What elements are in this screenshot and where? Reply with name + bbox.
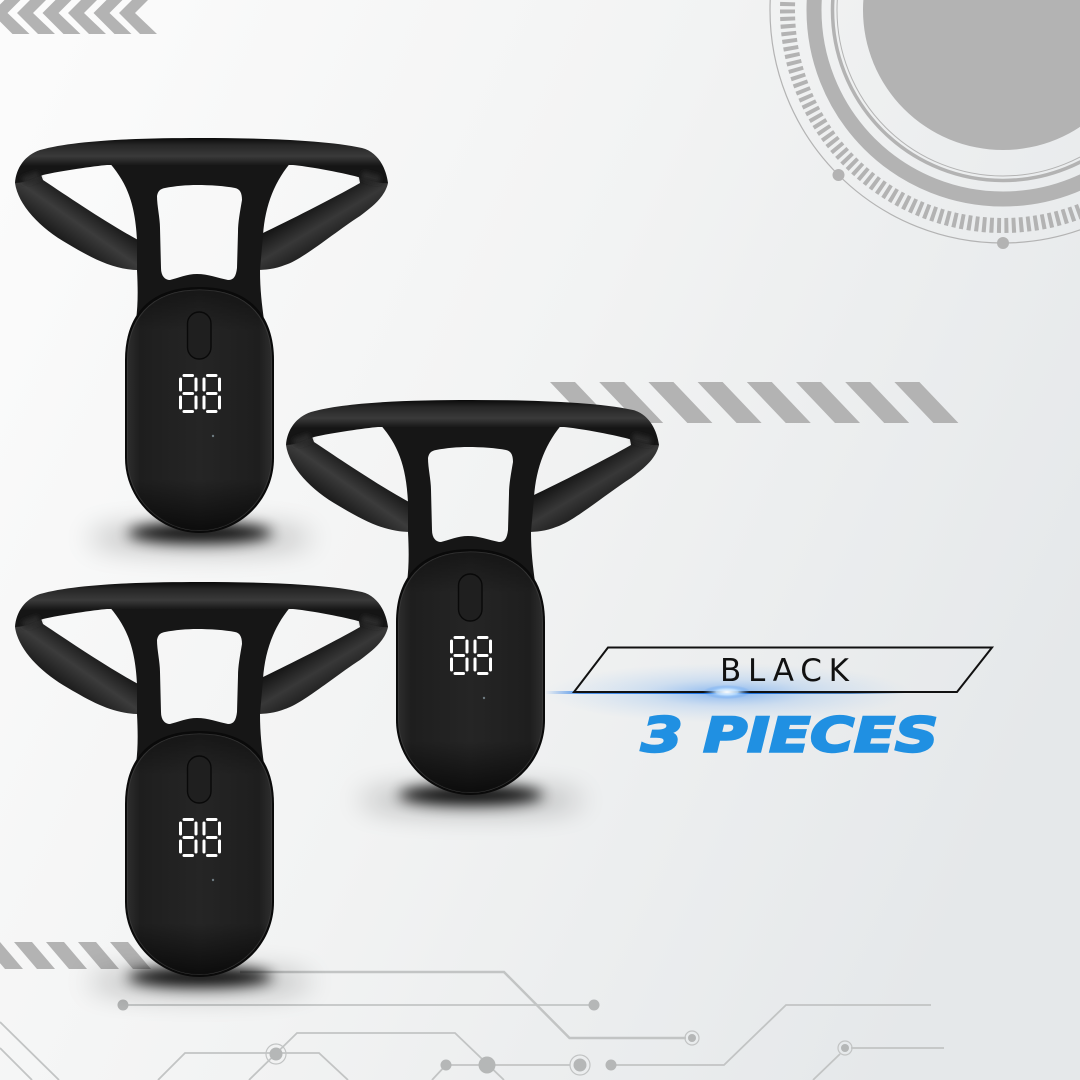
light flare (703, 685, 751, 699)
label text: BLACK (720, 653, 850, 689)
circuit lines: bottom (0, 972, 944, 1080)
product: centre posture device (286, 400, 659, 812)
heading: 3 PIECES: 3 PIECES (641, 708, 938, 764)
product: top left posture device (15, 138, 388, 550)
label box: BLACK (574, 648, 992, 692)
diagonal stripes: middle (550, 382, 958, 423)
blue glow under label (543, 663, 913, 723)
product: bottom left posture device (15, 582, 388, 994)
diagonal stripes: bottom left (0, 942, 151, 969)
chevrons: top left (0, 0, 157, 34)
concentric circle emblem: top right (770, 0, 1080, 249)
